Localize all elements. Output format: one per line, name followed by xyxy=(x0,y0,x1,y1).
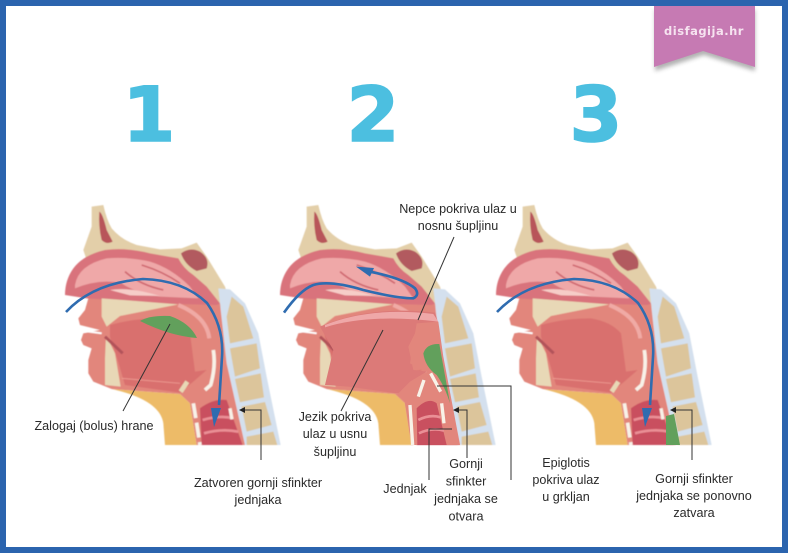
ribbon badge: disfagija.hr: disfagija.hr xyxy=(664,24,744,38)
label: upper sphincter closes: Gornji sfinkter xyxy=(655,472,733,486)
step number 2: 2 xyxy=(347,70,399,159)
green bolus in pharynx xyxy=(423,344,450,403)
ribbon badge: disfagija.hr xyxy=(654,6,755,71)
label: epiglottis: pokriva ulaz xyxy=(532,473,600,487)
step number 3: 3 xyxy=(570,70,622,159)
green food bolus xyxy=(140,316,197,338)
label: upper sphincter opens: Gornji xyxy=(449,457,483,471)
label: upper sphincter closes: zatvara xyxy=(673,506,715,520)
label: epiglottis: u grkljan xyxy=(542,490,590,504)
panel: step 1 anatomy xyxy=(65,205,281,460)
label: epiglottis: Epiglotis xyxy=(542,456,590,470)
leader line: esophagus xyxy=(429,429,452,480)
leader line: palate xyxy=(418,237,454,320)
esophagus rings xyxy=(418,416,444,433)
blue arrow xyxy=(284,272,417,313)
step number 1: 1 xyxy=(123,70,175,159)
label: upper sphincter closes: jednjaka se ponovno xyxy=(635,489,752,503)
label: esophagus: Jednjak xyxy=(383,482,427,496)
arrow head xyxy=(356,267,374,277)
arrow head xyxy=(642,408,652,427)
label: tongue: Jezik pokriva xyxy=(299,410,371,424)
leader line: epiglottis xyxy=(437,386,511,480)
leader line: bolus xyxy=(123,324,170,411)
label: upper sphincter opens: sfinkter xyxy=(446,474,486,488)
epiglottis cartilage xyxy=(410,373,444,445)
label: upper sphincter opens: otvara xyxy=(448,510,484,524)
esophagus xyxy=(417,401,447,445)
label: palate: Nepce pokriva ulaz u xyxy=(399,202,517,216)
leader line: sphincter xyxy=(240,410,261,460)
label: closed upper sphincter: Zatvoren gornji sfinkter xyxy=(194,476,322,490)
panel: step 2 anatomy xyxy=(280,205,511,480)
leader line: upper sphincter xyxy=(454,410,467,458)
label: bolus: Zalogaj (bolus) hrane xyxy=(34,419,154,433)
panel: step 3 anatomy xyxy=(496,205,712,460)
label: tongue: šupljinu xyxy=(314,445,356,459)
raised tongue and soft palate xyxy=(320,311,438,393)
label: palate: nosnu šupljinu xyxy=(418,219,498,233)
arrow head xyxy=(211,408,221,427)
blue arrow xyxy=(66,279,222,405)
pharynx tissue xyxy=(405,322,460,445)
label: tongue: ulaz u usnu xyxy=(303,427,367,441)
green bolus in esophagus xyxy=(666,414,680,445)
label: closed upper sphincter: jednjaka xyxy=(234,493,281,507)
blue arrow xyxy=(497,279,653,405)
leader line: sphincter xyxy=(671,410,692,460)
leader line: tongue xyxy=(341,330,383,411)
label: upper sphincter opens: jednjaka se xyxy=(433,492,498,506)
